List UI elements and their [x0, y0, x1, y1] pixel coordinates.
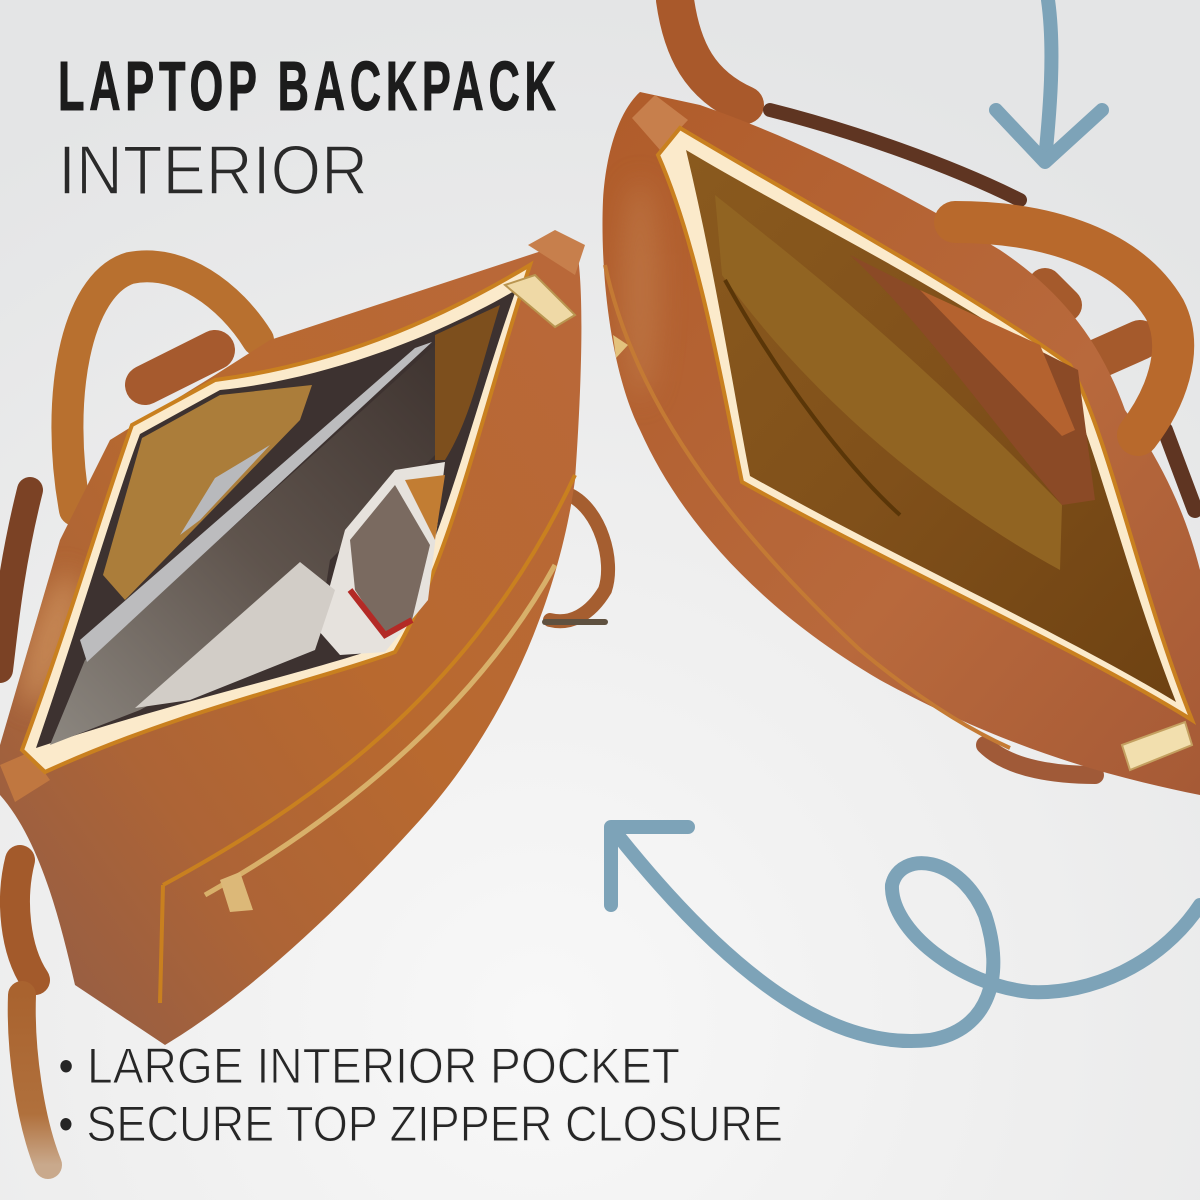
- left bag straps: [0, 266, 608, 1165]
- title line 2: INTERIOR: [58, 131, 368, 209]
- arrow: looping curved arrow: [611, 827, 1200, 1041]
- left bag shell: [0, 240, 581, 1045]
- right bag shell: [602, 92, 1200, 795]
- book: [135, 562, 335, 708]
- left bag interior opening: [22, 265, 530, 772]
- right bag zipper pull: [1122, 722, 1192, 770]
- left bag: open backpack with contents: [0, 230, 608, 1165]
- water bottle: [318, 462, 445, 655]
- front pocket seam: [163, 475, 575, 885]
- phone: [180, 445, 270, 535]
- right bag front handle: [955, 222, 1173, 435]
- laptop: [50, 345, 435, 745]
- bullet two: • SECURE TOP ZIPPER CLOSURE: [58, 1096, 783, 1152]
- right bag rear straps: [675, 0, 1195, 775]
- left bag end tabs: [528, 230, 585, 275]
- right bag inner pocket: [715, 195, 1062, 570]
- right bag shading: [622, 180, 658, 400]
- right bag lower seam: [605, 265, 1010, 748]
- title line 1: LAPTOP BACKPACK: [58, 47, 556, 126]
- right bag interior opening: [658, 128, 1192, 720]
- left bag suede pocket: [103, 385, 312, 600]
- pocket zipper pull: [220, 872, 253, 912]
- right bag: top-down open backpack: [602, 0, 1200, 795]
- feature list: [58, 1038, 783, 1152]
- right bag side zip pull: [613, 335, 628, 358]
- right bag end tab: [632, 95, 688, 150]
- arrow: top down arrow: [996, 0, 1102, 162]
- left bag highlight: [16, 572, 79, 708]
- title: [58, 47, 556, 209]
- interior leather sliver: [435, 305, 500, 460]
- bullet one: • LARGE INTERIOR POCKET: [58, 1038, 680, 1094]
- top zipper pull: [505, 275, 575, 327]
